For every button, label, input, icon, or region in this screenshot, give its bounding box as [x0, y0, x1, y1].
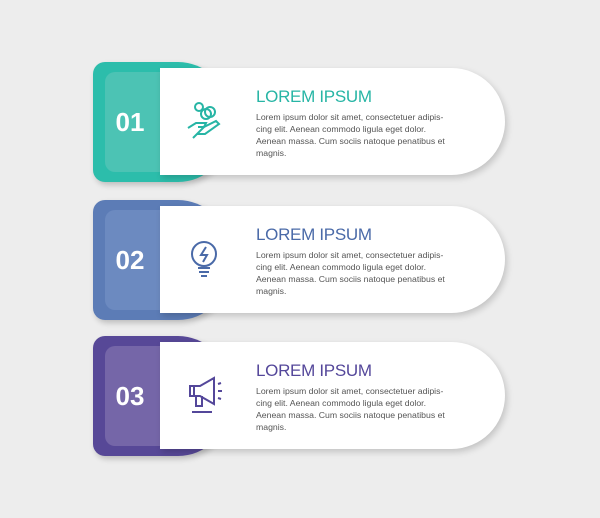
number block 03 — [93, 336, 228, 456]
number block 01 — [93, 62, 228, 182]
text 2: magnis. — [256, 286, 286, 296]
row 2 — [92, 200, 510, 326]
number block 03: 03 — [116, 381, 144, 411]
text 3: magnis. — [256, 422, 286, 432]
text 3: Aenean massa. Cum sociis natoque penatibus et — [256, 410, 445, 420]
title 2: LOREM IPSUM — [256, 225, 372, 244]
card 1 — [160, 68, 505, 175]
title 1: LOREM IPSUM — [256, 87, 372, 106]
text 1 — [256, 112, 445, 158]
text 3: Lorem ipsum dolor sit amet, consectetuer adipis- — [256, 386, 443, 396]
card 2 — [160, 206, 505, 313]
icon: megaphone — [189, 376, 222, 413]
row 3 — [92, 336, 510, 462]
number block 02 — [93, 200, 228, 320]
number block 01: 01 — [116, 107, 144, 137]
number block 02: 02 — [116, 245, 144, 275]
text 2 — [256, 250, 445, 296]
title 3: LOREM IPSUM — [256, 361, 372, 380]
text 3 — [256, 386, 445, 432]
text 1: cing elit. Aenean commodo ligula eget dolor. — [256, 124, 426, 134]
row 1 — [92, 62, 510, 188]
text 3: cing elit. Aenean commodo ligula eget dolor. — [256, 398, 426, 408]
text 1: Lorem ipsum dolor sit amet, consectetuer adipis- — [256, 112, 443, 122]
icon: light bulb — [191, 241, 217, 277]
text 1: Aenean massa. Cum sociis natoque penatibus et — [256, 136, 445, 146]
text 2: Lorem ipsum dolor sit amet, consectetuer adipis- — [256, 250, 443, 260]
card 3 — [160, 342, 505, 449]
text 2: Aenean massa. Cum sociis natoque penatibus et — [256, 274, 445, 284]
text 2: cing elit. Aenean commodo ligula eget dolor. — [256, 262, 426, 272]
text 1: magnis. — [256, 148, 286, 158]
icon: money hand — [188, 102, 220, 139]
